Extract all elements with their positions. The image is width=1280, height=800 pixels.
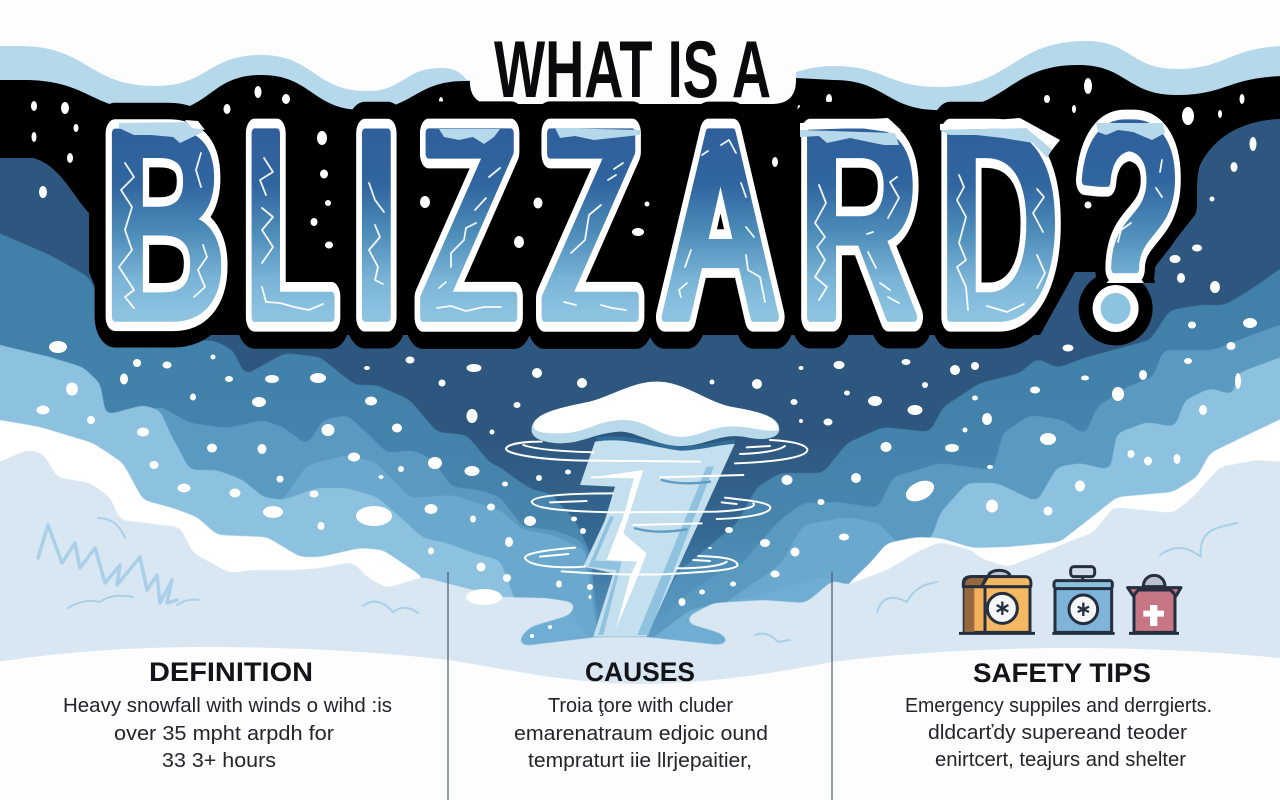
title gradient fill: A (668, 77, 772, 374)
cloud shadow (532, 382, 779, 446)
white header tab (467, 0, 796, 104)
title gradient fill: B (104, 76, 224, 375)
cloud layer: light blue (0, 455, 1280, 800)
snow bank left (0, 418, 423, 620)
background: pale blue wave band (0, 41, 1280, 130)
heading: what is a: WHAT IS A (494, 25, 771, 115)
title gradient fill: D (941, 75, 1056, 374)
title white outline: Z (544, 76, 637, 375)
definition text: 33 3+ hours (162, 750, 276, 772)
causes text: emarenatraum edjoic ound (514, 723, 768, 745)
title gradient fill: R (801, 75, 918, 374)
grass scribble (38, 525, 177, 603)
icon: orange kit (959, 570, 1035, 633)
illustration: cloud and swirling wind (506, 382, 807, 575)
cloud layer: palest blue right (860, 350, 1280, 800)
safety tips text: Emergency suppiles and derrgierts. (905, 695, 1212, 717)
cloud layer: palest blue left (0, 338, 530, 800)
title black outline: L (246, 77, 333, 374)
background: black night band (0, 65, 1280, 335)
title gradient fill: ? (1082, 66, 1174, 380)
title white outline: I (354, 76, 399, 374)
bottom white panel (0, 647, 1280, 800)
title white outline: B (104, 76, 224, 375)
heading: safety tips: SAFETY TIPS (973, 658, 1151, 688)
snowflakes (31, 78, 1257, 638)
title black outline: Z (422, 76, 515, 375)
background: dark storm sky (0, 115, 1280, 715)
title gradient fill: Z (544, 76, 637, 375)
heading: definition: DEFINITION (149, 657, 313, 687)
wind swirl lines (506, 440, 807, 575)
title gradient fill: Z (422, 76, 515, 375)
title black outline (94, 94, 1176, 349)
wind squiggles inside letters (119, 140, 1162, 312)
title gradient fill (112, 119, 1175, 324)
causes text: tempraturt iie llrjepaitier, (528, 750, 752, 772)
wind shadows (635, 480, 710, 532)
title white outline (106, 110, 1181, 332)
title white outline: Z (422, 76, 515, 375)
snow bank right (847, 410, 1280, 620)
title white outline: D (941, 75, 1056, 374)
title white outline: A (668, 77, 772, 374)
definition text (63, 695, 392, 772)
title: BLIZZARD? (94, 94, 1181, 349)
title black outline: B (104, 76, 224, 375)
definition text: over 35 mpht arpdh for (114, 723, 334, 745)
title black outline: I (354, 76, 399, 374)
tornado funnel (580, 440, 735, 637)
illustration: tornado body and lightning bolt (580, 440, 735, 637)
doodles on the ground: grass and birds (38, 518, 1237, 642)
title black outline: A (668, 77, 772, 374)
cloud layers (0, 225, 1280, 800)
title white outline: R (801, 75, 918, 374)
title black outline: ? (1082, 66, 1174, 380)
panel: safety tips (905, 658, 1212, 771)
foreground pale snow ground (0, 450, 1280, 800)
title white outline: ? (1082, 66, 1174, 380)
birds (68, 518, 1237, 642)
snow caps on letters (119, 118, 1165, 158)
lightning bolt (592, 470, 647, 628)
icons: emergency kits (959, 567, 1181, 633)
cloud top (533, 382, 778, 437)
title black outline: R (801, 75, 918, 374)
title black outline: D (941, 75, 1056, 374)
cloud layer: mound at tornado base (500, 575, 860, 800)
cloud layer: lighter blue (0, 320, 1280, 800)
cloud layer: mid blue (0, 225, 1280, 800)
dark gap under cloud (597, 438, 735, 449)
icon: pink kit (1128, 575, 1181, 633)
funnel shading (588, 467, 714, 635)
causes text (514, 695, 768, 772)
snowflakes between the title letters (310, 131, 1092, 248)
safety tips text: enirtcert, teajurs and shelter (935, 749, 1186, 771)
divider right (831, 572, 833, 800)
safety tips text: dldcarťdy supereand teoder (928, 722, 1187, 744)
icon: blue kit (1052, 567, 1115, 633)
snow patch near first divider (466, 589, 502, 605)
title white outline: L (246, 77, 333, 374)
title gradient fill: I (354, 76, 399, 374)
panel: causes (514, 657, 768, 772)
safety tips text (905, 695, 1212, 771)
title gradient fill: L (246, 77, 333, 374)
heading: causes: CAUSES (585, 657, 695, 687)
definition text: Heavy snowfall with winds o wihd :is (63, 695, 392, 717)
title black outline: Z (544, 76, 637, 375)
causes text: Troia ţore with cluder (548, 695, 733, 717)
divider left (447, 572, 449, 800)
panel: definition (63, 657, 392, 772)
